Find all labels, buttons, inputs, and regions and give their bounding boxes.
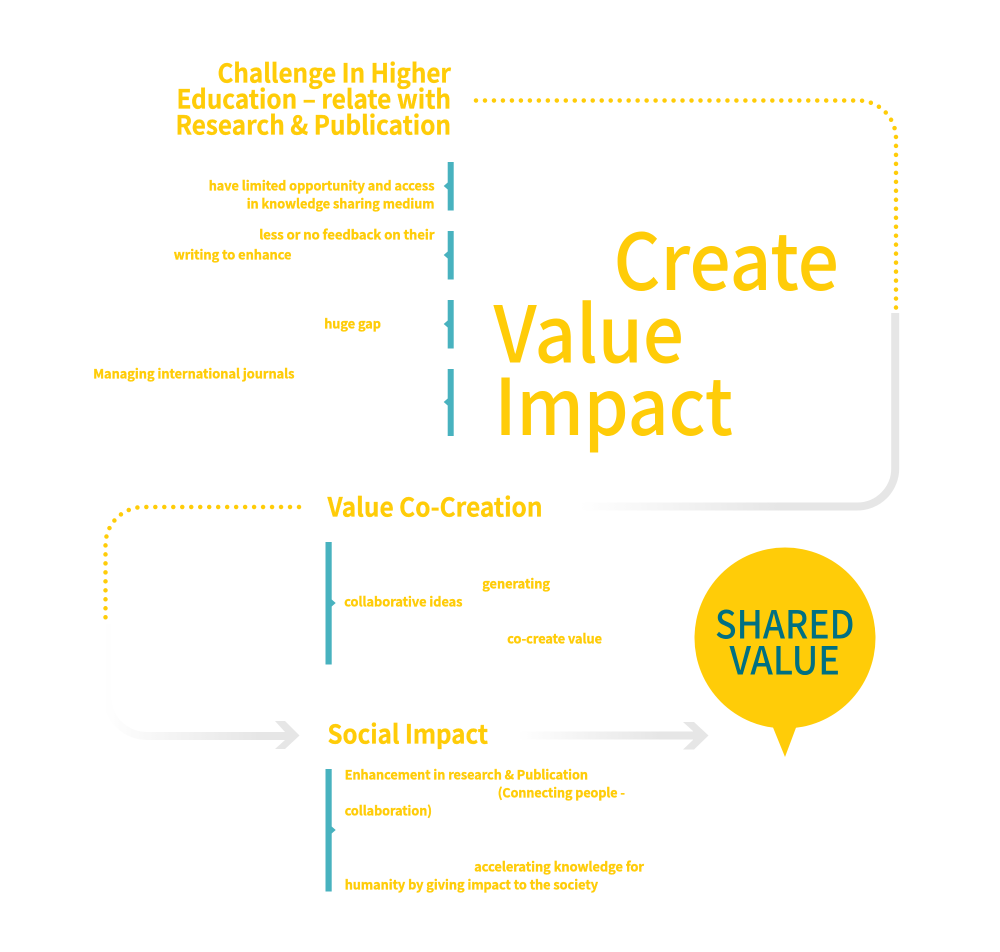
challenge point 4: Managing international journals bbox=[93, 364, 294, 382]
bracket: social impact bbox=[326, 769, 336, 892]
value co-creation points: co-create value bbox=[507, 628, 602, 648]
value co-creation points: collaborative ideas bbox=[344, 592, 462, 610]
big statement bbox=[493, 201, 839, 458]
big statement: Impact bbox=[494, 346, 733, 458]
big statement: Value bbox=[493, 274, 684, 386]
challenge point 1: in knowledge sharing medium bbox=[247, 194, 434, 212]
heading: social impact: Social Impact bbox=[328, 715, 488, 752]
heading: value co-creation: Value Co-Creation bbox=[327, 488, 542, 525]
bracket 2 bbox=[444, 231, 454, 280]
challenge point 2: writing to enhance bbox=[174, 244, 292, 264]
heading: challenge: Education – relate with bbox=[176, 80, 451, 117]
bracket 1 bbox=[444, 162, 454, 210]
big statement: Create bbox=[614, 201, 839, 313]
shared value badge: VALUE bbox=[729, 630, 840, 686]
social impact points: humanity by giving impact to the society bbox=[345, 874, 599, 894]
social impact points bbox=[345, 764, 644, 894]
challenge point 2: less or no feedback on their bbox=[259, 224, 435, 244]
grey connector: right side to value co-creation bbox=[580, 313, 895, 507]
grey arrow: left side to social impact bbox=[107, 624, 300, 749]
heading: challenge: Research & Publication bbox=[176, 106, 451, 143]
dotted connector: value co-creation to left side bbox=[106, 507, 299, 620]
bracket 4 bbox=[444, 369, 454, 436]
social impact points: collaboration) bbox=[345, 800, 432, 820]
heading: challenge bbox=[176, 54, 452, 143]
social impact points: (Connecting people - bbox=[498, 782, 625, 802]
social impact points: accelerating knowledge for bbox=[474, 856, 644, 876]
value co-creation points: generating bbox=[482, 574, 550, 592]
challenge point 1: have limited opportunity and access bbox=[209, 176, 434, 194]
bracket 3 bbox=[444, 300, 454, 348]
heading: challenge: Challenge In Higher bbox=[218, 54, 452, 91]
dotted connector: challenge to top right bbox=[476, 100, 896, 310]
shared value badge: SHARED bbox=[715, 594, 854, 650]
challenge point 2 bbox=[174, 224, 435, 264]
value co-creation points bbox=[344, 574, 602, 648]
shared value badge bbox=[694, 548, 876, 757]
bracket: value co-creation bbox=[326, 542, 336, 664]
challenge point 1 bbox=[209, 176, 434, 212]
grey arrow: social impact to shared value bbox=[518, 722, 708, 750]
challenge point 3: huge gap bbox=[324, 314, 381, 332]
social impact points: Enhancement in research & Publication bbox=[345, 764, 588, 784]
